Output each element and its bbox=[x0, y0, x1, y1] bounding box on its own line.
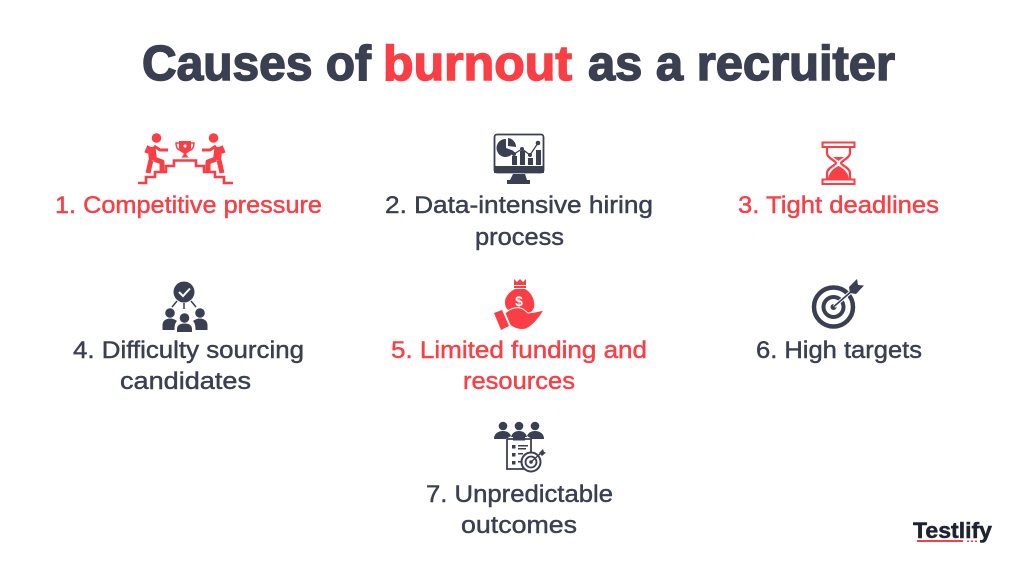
title: burnout bbox=[383, 37, 572, 91]
item 3: tight deadlines bbox=[738, 142, 939, 219]
item 1: competitive pressure bbox=[55, 133, 322, 219]
icon: team above clipboard and target bbox=[494, 422, 546, 472]
icon: hand holding money bag: $ bbox=[515, 293, 523, 309]
icon: hourglass bbox=[822, 142, 854, 184]
icon: bullseye with arrow bbox=[814, 279, 864, 326]
icon: medal above three people bbox=[162, 282, 208, 332]
label: 6. High targets bbox=[756, 337, 922, 364]
item 5: limited funding and resources: resources bbox=[463, 368, 575, 395]
item 5: limited funding and resources bbox=[391, 279, 647, 395]
icon: runners on stairs with trophy bbox=[138, 133, 233, 183]
label: 7. Unpredictable bbox=[426, 481, 613, 508]
title: Causes of bbox=[142, 37, 372, 91]
label: 3. Tight deadlines bbox=[738, 192, 939, 219]
label: 1. Competitive pressure bbox=[55, 192, 322, 219]
icon: monitor with charts bbox=[494, 134, 544, 184]
icon: hand holding money bag bbox=[494, 279, 544, 330]
item 4: difficulty sourcing candidates bbox=[73, 282, 304, 395]
title bbox=[142, 37, 895, 91]
item 2: data-intensive hiring process bbox=[385, 134, 653, 251]
item 6: high targets bbox=[756, 279, 922, 364]
label: 2. Data-intensive hiring bbox=[385, 192, 653, 219]
label: 4. Difficulty sourcing bbox=[73, 337, 304, 364]
label: 5. Limited funding and bbox=[391, 337, 647, 364]
item 4: difficulty sourcing candidates: candidates bbox=[120, 368, 251, 395]
item 7: unpredictable outcomes: outcomes bbox=[461, 512, 577, 539]
title: as a recruiter bbox=[588, 37, 895, 91]
item 2: data-intensive hiring process: process bbox=[475, 224, 564, 251]
item 7: unpredictable outcomes bbox=[426, 422, 613, 539]
logo: Testlify: Testlify bbox=[913, 518, 993, 543]
